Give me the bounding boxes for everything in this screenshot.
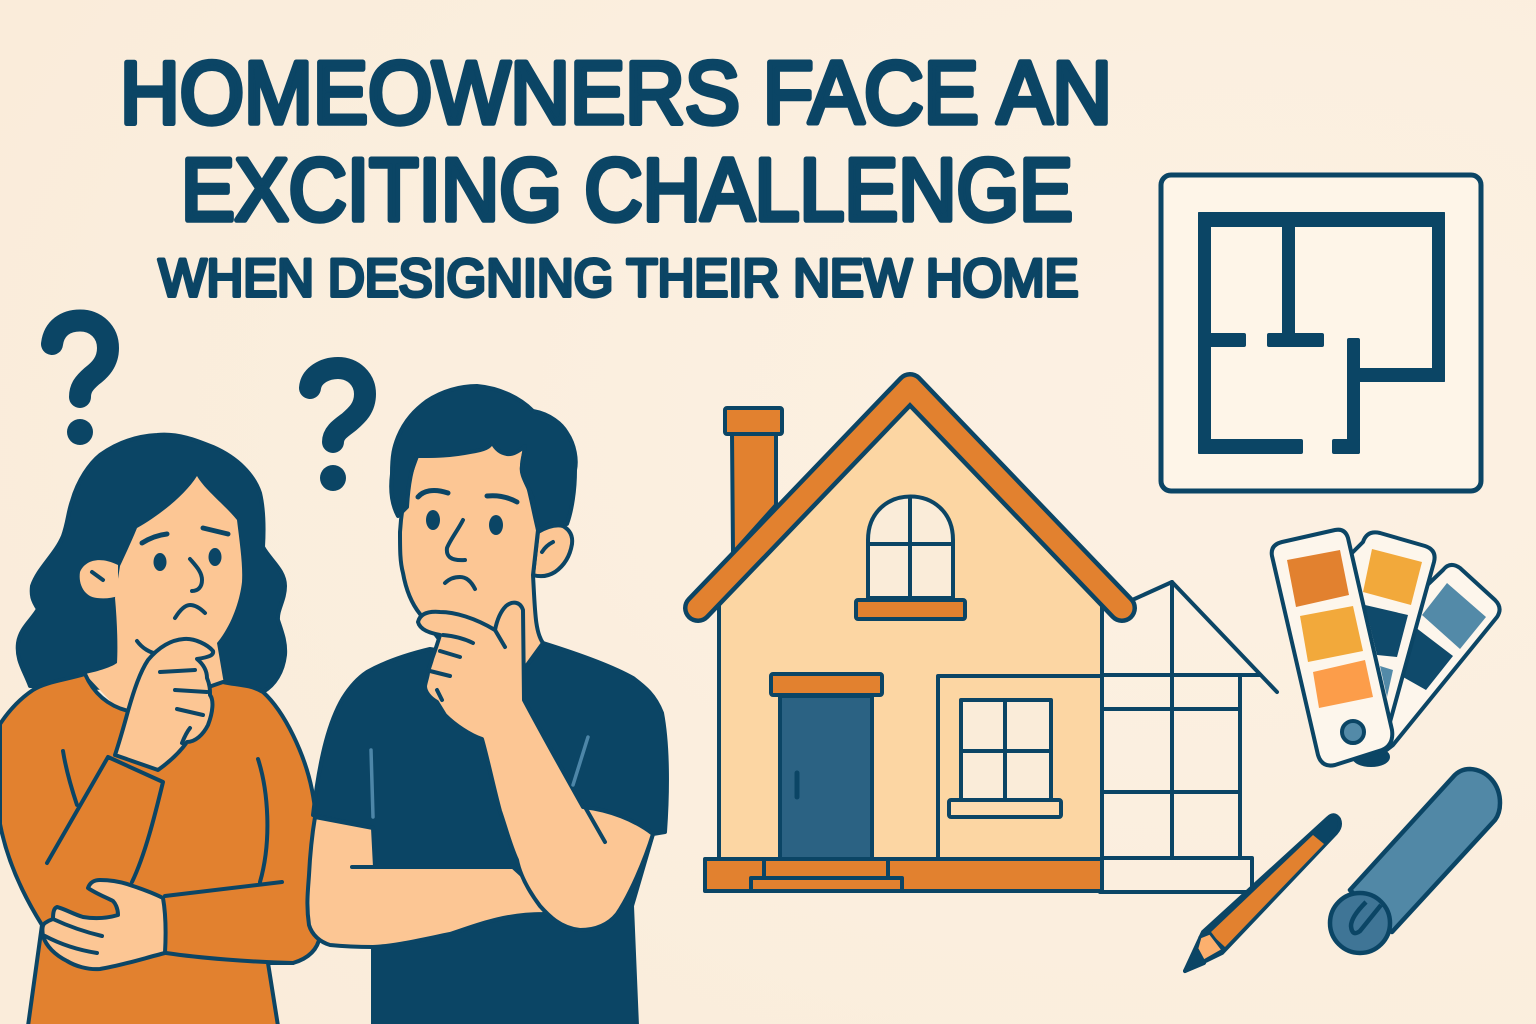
swatch card right <box>1370 565 1500 755</box>
foundation <box>705 859 1102 891</box>
man arm crease <box>352 865 515 869</box>
woman neck and face <box>85 476 242 720</box>
illustration: house <box>698 387 1277 892</box>
swatch card front <box>1272 530 1392 766</box>
man face and neck <box>400 442 543 680</box>
swatch card middle <box>1345 532 1435 735</box>
man finger lines <box>430 630 605 842</box>
woman lower hand <box>42 880 166 969</box>
woman sweater <box>0 674 320 1024</box>
door lintel <box>771 674 882 695</box>
title: EXCITING CHALLENGE <box>181 140 1073 239</box>
woman hair <box>18 435 285 692</box>
man hair <box>391 386 576 530</box>
woman sleeve lines <box>47 751 293 963</box>
man brows <box>418 490 517 502</box>
icon: question mark left <box>52 320 108 445</box>
figure: man <box>307 386 667 1024</box>
title: HOMEOWNERS FACE AN <box>120 43 1112 142</box>
title <box>120 43 1112 308</box>
icon: floor plan <box>1161 175 1481 491</box>
wireframe extension <box>1090 582 1277 892</box>
man shirt highlights <box>371 737 588 817</box>
lower sill <box>949 800 1061 817</box>
icon: paint swatches <box>1272 530 1500 766</box>
man ear <box>533 525 572 576</box>
bay panel <box>938 676 1102 859</box>
woman brows <box>142 528 228 543</box>
woman finger lines <box>160 670 207 743</box>
man t-shirt <box>313 643 667 1024</box>
woman eyes <box>154 548 222 571</box>
man forearm and hand <box>418 603 653 930</box>
woman ear detail <box>92 572 103 580</box>
roof <box>698 387 1122 608</box>
steps <box>751 859 902 891</box>
lower window <box>961 700 1051 800</box>
title: WHEN DESIGNING THEIR NEW HOME <box>158 249 1078 308</box>
swatch base <box>1354 749 1388 765</box>
door <box>780 696 872 859</box>
woman finger detail <box>45 919 102 953</box>
woman hand at chin <box>115 639 213 770</box>
walls <box>719 400 1102 859</box>
icon: blueprint roll <box>1330 769 1500 953</box>
window sill <box>856 600 965 619</box>
man eyes <box>426 510 503 535</box>
man left arm <box>307 817 560 947</box>
icon: question mark right <box>310 368 365 491</box>
figure: woman <box>0 435 320 1024</box>
woman ear <box>80 560 118 598</box>
man nose, mouth, ear detail <box>445 520 553 589</box>
woman nose and mouth <box>137 559 205 654</box>
arched window <box>868 496 953 598</box>
icon: pencil <box>1185 815 1340 971</box>
chimney <box>732 434 776 553</box>
door handle <box>794 773 800 797</box>
